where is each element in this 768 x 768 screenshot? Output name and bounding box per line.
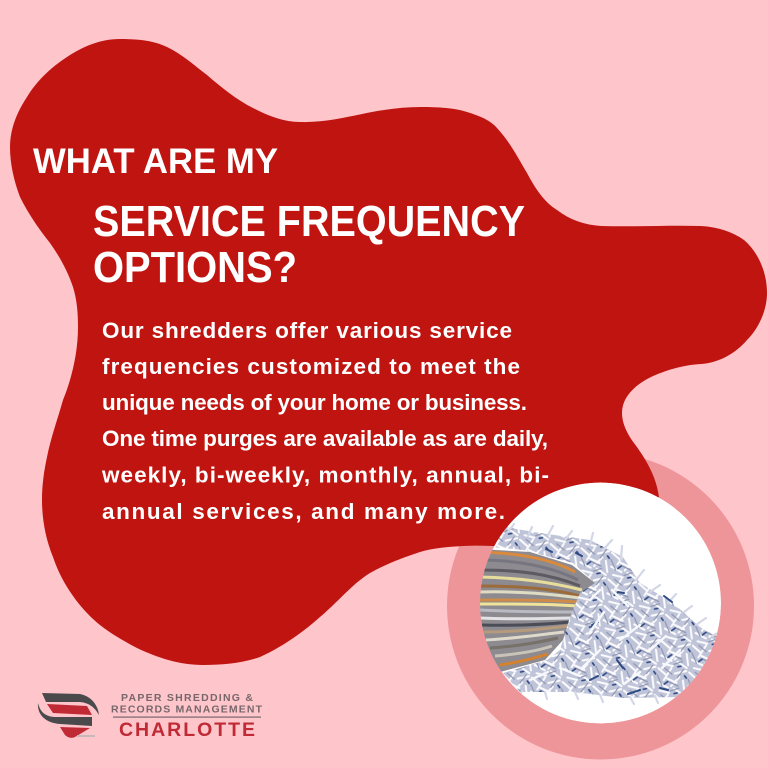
heading: what are my: WHAT ARE MY [33, 142, 278, 181]
photo: shredded paper pile [478, 482, 722, 724]
body text: annual services, and many more. [102, 499, 505, 524]
logo icon [38, 693, 99, 738]
heading: service frequency options: OPTIONS? [93, 244, 297, 292]
pile edge strands [497, 524, 722, 704]
heading: service frequency options [93, 198, 525, 292]
body text: weekly, bi-weekly, monthly, annual, bi- [101, 462, 549, 488]
logo wordmark [111, 692, 263, 716]
logo [38, 692, 263, 741]
body text [101, 318, 549, 524]
body text: frequencies customized to meet the [102, 354, 520, 379]
heading: service frequency options: SERVICE FREQUENCY [93, 198, 525, 246]
body text: One time purges are available as are daily, [102, 426, 548, 451]
body text: Our shredders offer various service [102, 318, 512, 343]
logo wordmark: PAPER SHREDDING & [121, 692, 253, 704]
logo: CHARLOTTE [119, 719, 255, 741]
paper stack [478, 549, 595, 672]
body text: unique needs of your home or business. [102, 390, 527, 415]
shredded pile [493, 524, 722, 704]
decorative ring behind photo [447, 452, 754, 760]
logo wordmark: RECORDS MANAGEMENT [111, 704, 263, 716]
